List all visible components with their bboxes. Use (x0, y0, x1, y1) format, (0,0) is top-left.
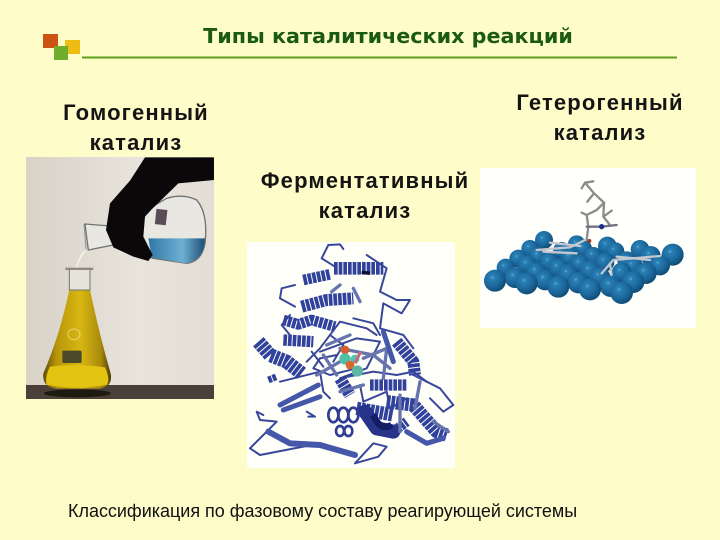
adsorbed molecule (537, 181, 660, 275)
barrel rings (328, 408, 358, 436)
grey-blue mid strands (317, 285, 448, 432)
photo: spheres on catalyst surface (480, 168, 696, 328)
photo: pouring flasks (26, 157, 214, 399)
heading: enzymatic catalysis: Ферментативный (261, 168, 469, 193)
blue flask (85, 196, 206, 263)
photo: enzyme protein structure (247, 242, 455, 468)
caption: Классификация по фазовому составу реагирующей системы (68, 501, 577, 521)
heading: homogeneous catalysis (63, 100, 209, 155)
heading: homogeneous catalysis: Гомогенный (63, 100, 209, 125)
icon: logo squares (43, 34, 80, 60)
title underline (82, 56, 677, 58)
heading: homogeneous catalysis: катализ (90, 130, 182, 155)
active site ligand (339, 346, 363, 377)
helices (258, 268, 447, 435)
heading: heterogeneous catalysis (516, 90, 684, 145)
yellow flask (43, 290, 111, 389)
loops (250, 244, 453, 463)
heading: heterogeneous catalysis: катализ (554, 120, 646, 145)
glove (106, 157, 214, 261)
title: Типы каталитических реакций (203, 24, 573, 48)
heading: enzymatic catalysis: катализ (319, 198, 411, 223)
heading: enzymatic catalysis (261, 168, 469, 223)
stream (73, 250, 86, 285)
heading: heterogeneous catalysis: Гетерогенный (516, 90, 684, 115)
